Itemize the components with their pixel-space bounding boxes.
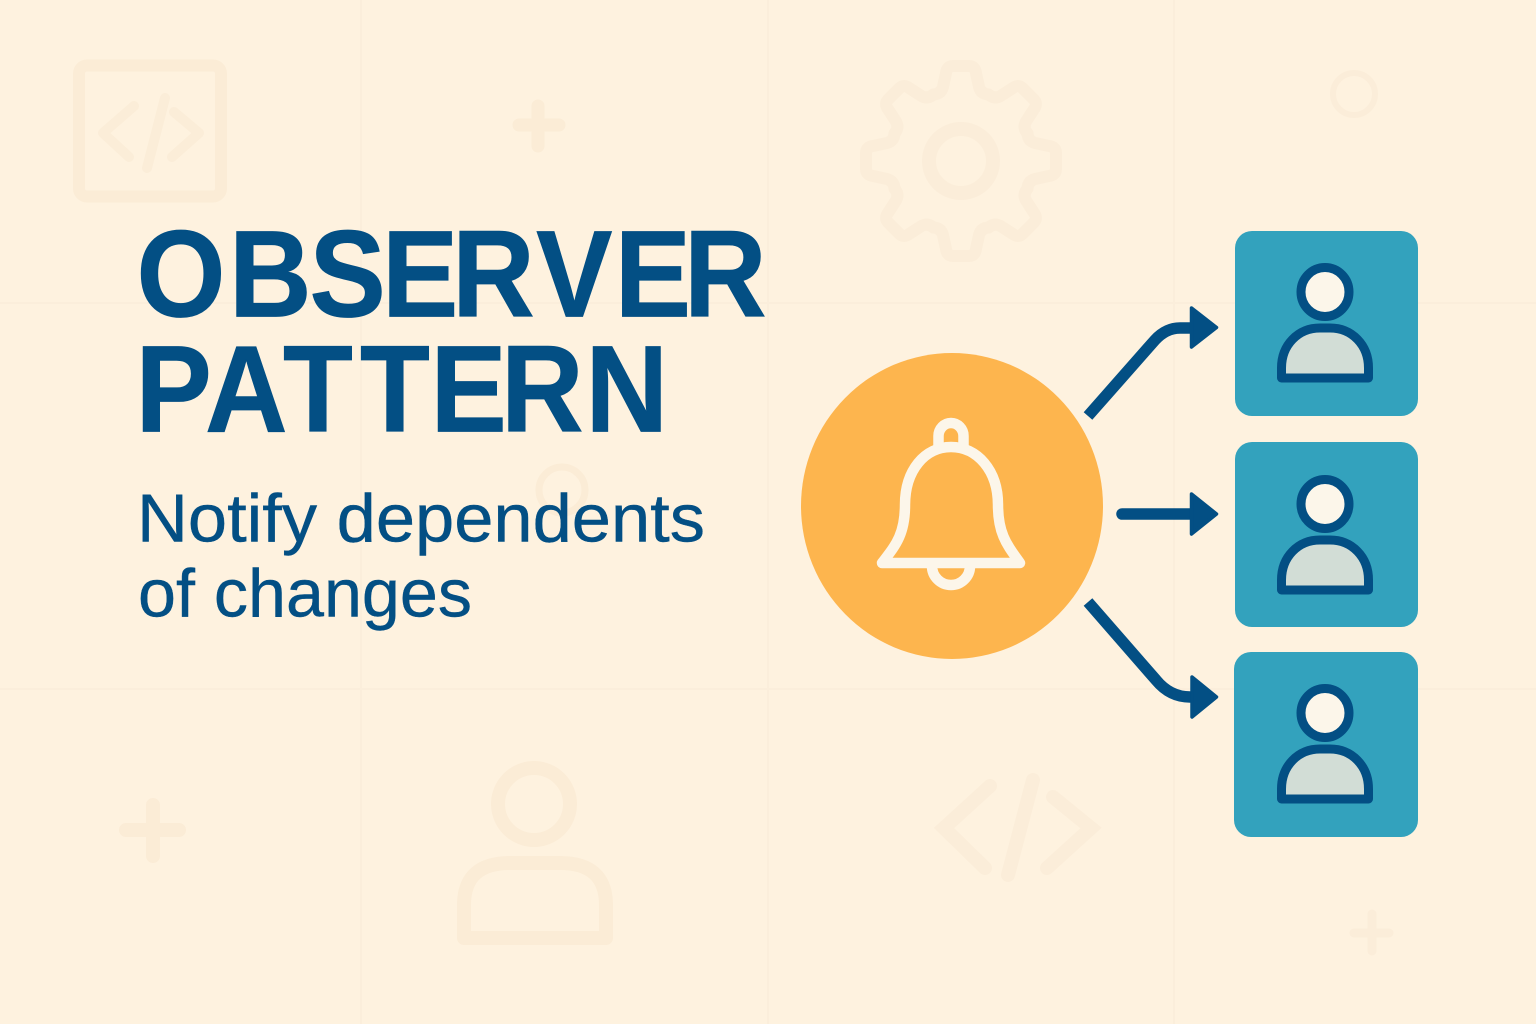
- subtitle: Notify dependents: [137, 481, 705, 557]
- arrow to observer 3: [1088, 602, 1216, 717]
- title: PATTERN: [136, 321, 668, 459]
- background icon: plus bottom right: [1354, 914, 1389, 951]
- background icon: plus top: [519, 106, 559, 146]
- observer card 1: [1235, 231, 1418, 416]
- background icon: small circle top right: [1333, 73, 1375, 115]
- background icon: gear: [866, 66, 1056, 256]
- icon: person 3: [1282, 688, 1368, 799]
- subject circle with bell: [801, 353, 1103, 659]
- observer card 2: [1235, 442, 1418, 627]
- subtitle: [137, 481, 705, 632]
- title: [136, 206, 767, 459]
- background icon: code window: [79, 66, 221, 196]
- subtitle: of changes: [138, 556, 472, 632]
- background icon: person: [464, 768, 606, 938]
- title: OBSERVER: [137, 206, 767, 344]
- icon: person 2: [1282, 480, 1368, 590]
- arrow to observer 1: [1088, 308, 1216, 416]
- observer card 3: [1234, 652, 1418, 837]
- background icon: circle behind subtitle: [539, 467, 585, 513]
- icon: bell: [882, 423, 1020, 585]
- background icon: code brackets: [944, 780, 1091, 875]
- arrow to observer 2: [1122, 494, 1216, 534]
- background icon: plus bottom left: [126, 805, 179, 856]
- icon: person 1: [1282, 268, 1368, 378]
